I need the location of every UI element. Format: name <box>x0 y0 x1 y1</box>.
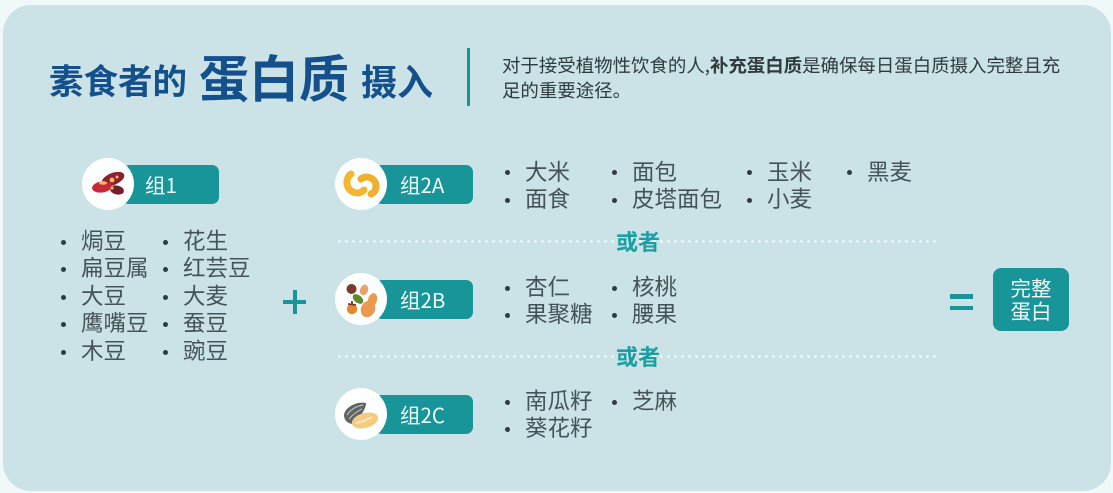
list: group 2A foods: 大米 <box>525 154 570 186</box>
group 2B header <box>335 273 473 325</box>
list: group 2A foods: 黑麦 <box>867 154 912 186</box>
equals sign <box>950 294 973 310</box>
label pill: group 2A <box>375 165 473 204</box>
list: group 1 foods: 鹰嘴豆 <box>81 306 149 338</box>
list: group 1 foods: 花生 <box>183 224 228 256</box>
list: group 2B foods: 杏仁 <box>525 270 570 302</box>
title part: vegetarian: 素食者的 <box>49 54 187 104</box>
title part: protein: 蛋白质 <box>199 40 349 112</box>
label pill: group 2C <box>375 395 473 434</box>
icon: macaroni <box>335 158 387 210</box>
list: group 2C foods: 芝麻 <box>632 384 677 416</box>
list: group 1 foods: 扁豆属 <box>81 251 149 283</box>
icon: beans <box>82 158 134 210</box>
list: group 1 foods: 大豆 <box>81 279 126 311</box>
title part: intake: 摄入 <box>361 54 433 106</box>
label pill: group 2A: 组2A <box>400 169 444 199</box>
list: group 2B foods: 腰果 <box>632 297 677 329</box>
icon: seed <box>335 388 387 440</box>
list: group 1 foods: 豌豆 <box>183 334 228 366</box>
icon: nuts <box>335 273 387 325</box>
list: group 2C foods <box>505 384 677 443</box>
description text <box>502 52 1060 103</box>
list: group 2A foods: 面包 <box>632 154 677 186</box>
list: group 1 foods: 木豆 <box>81 334 126 366</box>
result box: complete protein: 蛋白 <box>1010 295 1052 325</box>
label pill: group 2B: 组2B <box>400 284 445 314</box>
list: group 1 foods: 蚕豆 <box>183 306 228 338</box>
list: group 2A foods: 小麦 <box>767 182 812 214</box>
title divider <box>467 48 470 106</box>
group 2A header <box>335 158 473 210</box>
title <box>49 40 433 112</box>
group 1 header <box>82 158 219 210</box>
list: group 2A foods: 面食 <box>525 182 570 214</box>
label pill: group 1 <box>122 165 219 204</box>
list: group 2A foods: 皮塔面包 <box>632 182 722 214</box>
result box: complete protein: 完整 <box>1010 272 1052 302</box>
label pill: group 2C: 组2C <box>400 399 445 429</box>
or label 2: 或者 <box>616 340 660 372</box>
list: group 2A foods: 玉米 <box>767 154 812 186</box>
list: group 2C foods: 葵花籽 <box>525 411 593 443</box>
group 2C header <box>335 388 473 440</box>
list: group 1 foods <box>61 224 251 366</box>
list: group 2B foods <box>505 270 677 329</box>
list: group 1 foods: 红芸豆 <box>183 251 251 283</box>
description text: 对于接受植物性饮食的人,补充蛋白质是确保每日蛋白质摄入完整且充 <box>502 52 1060 78</box>
list: group 2A foods <box>505 154 912 214</box>
label pill: group 2B <box>375 280 473 319</box>
description text: 足的重要途径。 <box>502 77 631 103</box>
list: group 2B foods: 核桃 <box>632 270 677 302</box>
list: group 1 foods: 大麦 <box>183 279 228 311</box>
label pill: group 1: 组1 <box>145 169 177 199</box>
result box: complete protein <box>993 268 1069 331</box>
list: group 2B foods: 果聚糖 <box>525 297 593 329</box>
plus sign <box>283 290 306 314</box>
list: group 1 foods: 焗豆 <box>81 224 126 256</box>
or label 1: 或者 <box>616 225 660 257</box>
list: group 2C foods: 南瓜籽 <box>525 384 593 416</box>
